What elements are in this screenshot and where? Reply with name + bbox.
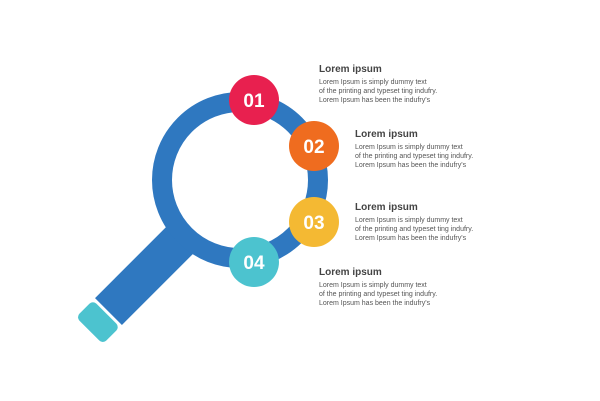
- text block 1: Lorem Ipsum is simply dummy text: [319, 79, 427, 86]
- text block 3: Lorem Ipsum is simply dummy text: [355, 217, 463, 224]
- step 04 badge: 04: [243, 253, 265, 274]
- text block 2: Lorem ipsum: [355, 129, 418, 140]
- text block 1: [319, 64, 437, 104]
- text block 2: Lorem Ipsum has been the indufry's: [355, 162, 466, 169]
- icon: magnifier ring: [162, 102, 318, 258]
- text block 3: Lorem ipsum: [355, 202, 418, 213]
- text block 4: Lorem Ipsum is simply dummy text: [319, 282, 427, 289]
- icon: magnifier handle: [76, 223, 197, 344]
- step 03 badge: 03: [303, 213, 325, 234]
- step 04 badge: [229, 237, 279, 287]
- text block 3: Lorem Ipsum has been the indufry's: [355, 235, 466, 242]
- text block 1: of the printing and typeset ting indufry.: [319, 88, 437, 95]
- text block 2: [355, 129, 473, 169]
- text block 4: of the printing and typeset ting indufry.: [319, 291, 437, 298]
- text block 4: [319, 267, 437, 307]
- step 03 badge: [289, 197, 339, 247]
- step 01 badge: 01: [243, 91, 265, 112]
- text block 3: [355, 202, 473, 242]
- text block 2: Lorem Ipsum is simply dummy text: [355, 144, 463, 151]
- text block 4: Lorem Ipsum has been the indufry's: [319, 300, 430, 307]
- text block 2: of the printing and typeset ting indufry.: [355, 153, 473, 160]
- text block 3: of the printing and typeset ting indufry.: [355, 226, 473, 233]
- text block 4: Lorem ipsum: [319, 267, 382, 278]
- step 02 badge: 02: [303, 137, 325, 158]
- text block 1: Lorem ipsum: [319, 64, 382, 75]
- text block 1: Lorem Ipsum has been the indufry's: [319, 97, 430, 104]
- step 02 badge: [289, 121, 339, 171]
- step 01 badge: [229, 75, 279, 125]
